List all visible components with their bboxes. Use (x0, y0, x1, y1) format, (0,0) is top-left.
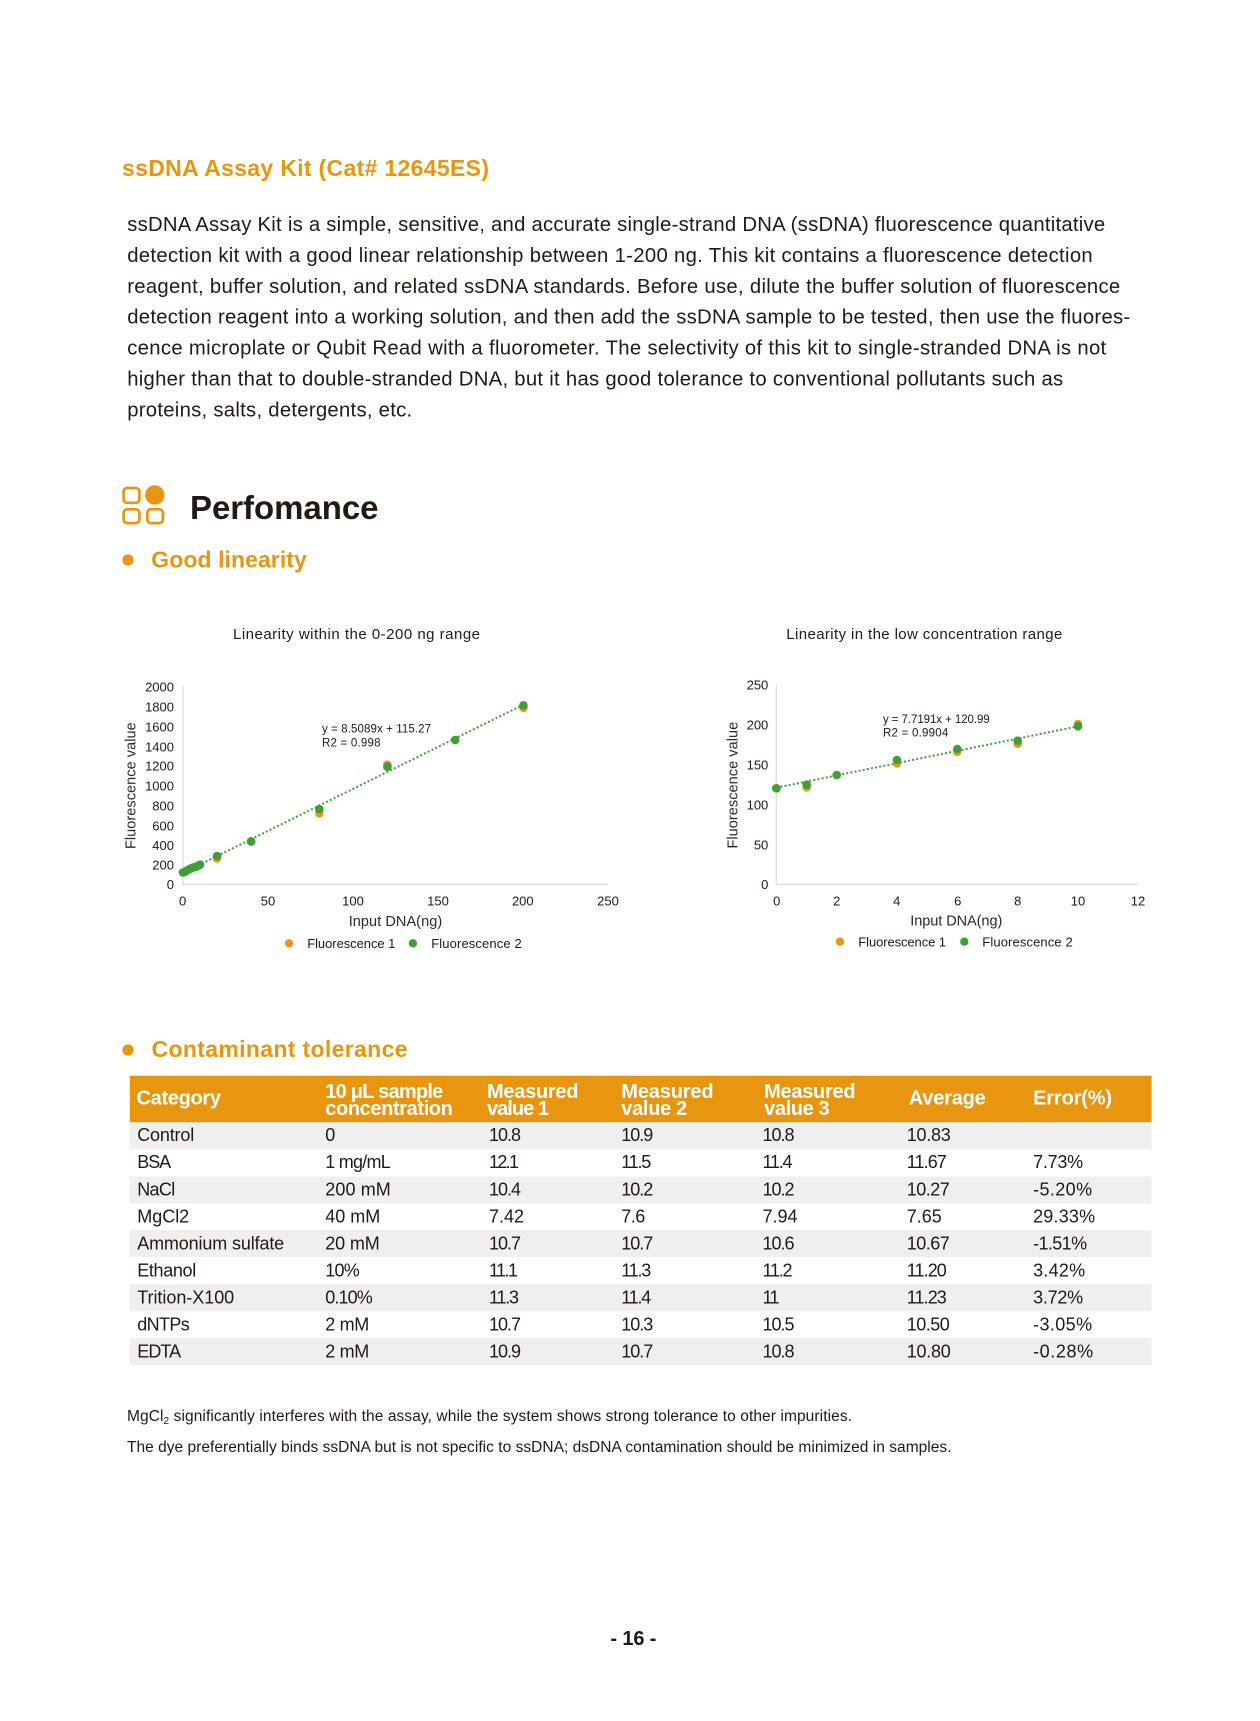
y axis ticks: 1000 (145, 778, 174, 794)
row: Ammonium sulfate (137, 1234, 1087, 1254)
row: dNTPs: dNTPs (137, 1314, 190, 1334)
series: fluorescence 1 (213, 703, 528, 863)
legend: Fluorescence 1 (307, 936, 395, 951)
table header: Measured (621, 1081, 714, 1103)
row: Ammonium sulfate: 20 mM (325, 1234, 380, 1254)
table header: Average (909, 1088, 986, 1110)
heading: Perfomance: Perfomance (190, 489, 378, 526)
table header: Measured (764, 1081, 856, 1103)
row: EDTA: 10.7 (621, 1342, 653, 1362)
x axis ticks: 100 (342, 894, 364, 908)
chart title: Linearity in the low concentration range (786, 626, 1062, 643)
row: Control: 10.8 (762, 1125, 794, 1145)
row: Ammonium sulfate: 10.6 (762, 1234, 794, 1254)
row: Ethanol: 10% (325, 1260, 360, 1280)
row: MgCl2: 7.42 (489, 1206, 524, 1226)
row: Ammonium sulfate: -1.51% (1033, 1234, 1087, 1254)
row: dNTPs (137, 1314, 1092, 1334)
equation (322, 724, 431, 750)
row: Control: Control (137, 1125, 194, 1145)
text block: notes (127, 1408, 952, 1456)
y axis title: Fluorescence value (124, 722, 140, 849)
page number: - 16 - (610, 1628, 656, 1650)
row: dNTPs: 10.7 (489, 1314, 521, 1334)
row: NaCl: 200 mM (325, 1180, 391, 1200)
row: NaCl: 10.27 (907, 1180, 950, 1200)
row: EDTA: 10.8 (762, 1342, 794, 1362)
y axis ticks: 600 (152, 818, 174, 834)
row: MgCl2: 29.33% (1033, 1206, 1095, 1226)
row: Control: 10.83 (907, 1125, 951, 1145)
text block: notes: 2 (164, 1416, 170, 1427)
table header: Category (136, 1088, 222, 1110)
row: EDTA: 10.9 (489, 1342, 521, 1362)
row: NaCl: NaCl (137, 1180, 175, 1200)
y axis ticks (145, 680, 174, 892)
text block: kit description: proteins, salts, detergents, etc. (127, 399, 412, 421)
row: BSA: 1 mg/mL (325, 1152, 391, 1172)
chart: linearity 0-200 ng (124, 626, 619, 951)
x axis ticks (773, 894, 1145, 908)
y axis ticks: 100 (747, 798, 768, 812)
text block: kit description: ssDNA Assay Kit is a simple, sensitive, and accurate single-strand DNA (ssDNA) fluorescence quantitative (127, 214, 1105, 236)
y axis ticks: 0 (167, 877, 174, 892)
series: fluorescence 1 (772, 720, 1082, 793)
row: NaCl: 10.2 (621, 1180, 653, 1200)
y axis ticks: 0 (761, 877, 768, 892)
text block: kit description: cence microplate or Qubit Read with a fluorometer. The selectivity of this kit to single-stranded DNA is not (127, 338, 1107, 360)
row: MgCl2: 40 mM (325, 1206, 380, 1226)
row: MgCl2: 7.94 (762, 1206, 798, 1226)
row: Ethanol: 11.2 (762, 1260, 792, 1280)
table header: value 2 (621, 1098, 687, 1120)
chart: linearity low concentration (726, 626, 1145, 949)
y axis ticks: 1600 (145, 720, 174, 734)
row: Trition-X100 (137, 1288, 1083, 1308)
table header: value 3 (764, 1098, 830, 1120)
row: MgCl2: MgCl2 (137, 1206, 189, 1226)
row: BSA (137, 1152, 1083, 1172)
row: Ethanol: 11.1 (489, 1260, 518, 1280)
text block: kit description: detection reagent into a working solution, and then add the ssDNA sample to be tested, then use the fluores- (127, 307, 1130, 329)
row: Control: 10.9 (621, 1125, 653, 1145)
chart title: Linearity within the 0-200 ng range (233, 626, 480, 643)
row: Trition-X100: 0.10% (325, 1288, 373, 1308)
table header: 10 μL sample (325, 1081, 443, 1103)
x axis ticks: 200 (512, 894, 534, 908)
x axis ticks: 0 (773, 894, 780, 908)
heading: Good linearity: Good linearity (151, 546, 307, 572)
legend: Fluorescence 2 (431, 936, 522, 951)
row: EDTA: 10.80 (907, 1342, 951, 1362)
table row stripes (130, 1122, 1152, 1365)
y axis ticks: 200 (747, 718, 768, 732)
trendline (183, 705, 523, 873)
equation: y = 8.5089x + 115.27 (322, 724, 431, 736)
row: Ethanol: Ethanol (137, 1260, 196, 1280)
row: Ethanol: 11.20 (907, 1260, 947, 1280)
equation: y = 7.7191x + 120.99 (883, 714, 990, 726)
text block: kit description: higher than that to double-stranded DNA, but it has good tolerance to conventional pollutants such as (127, 368, 1063, 390)
row: Ethanol (137, 1260, 1085, 1280)
row: Ethanol: 3.42% (1033, 1260, 1085, 1280)
axes (183, 687, 608, 884)
row: NaCl: 10.4 (489, 1180, 521, 1200)
row: NaCl: -5.20% (1033, 1180, 1092, 1200)
legend: Fluorescence 2 (982, 934, 1073, 949)
x axis ticks: 8 (1014, 894, 1021, 908)
x axis ticks: 2 (833, 894, 840, 908)
y axis ticks (747, 678, 768, 892)
equation: R2 = 0.9904 (883, 727, 949, 739)
row: dNTPs: -3.05% (1033, 1314, 1092, 1334)
heading: Contaminant tolerance: Contaminant tolerance (152, 1036, 408, 1062)
row: Trition-X100: 3.72% (1033, 1288, 1083, 1308)
row: EDTA: EDTA (137, 1342, 181, 1362)
y axis ticks: 250 (747, 678, 768, 692)
legend (836, 934, 1073, 949)
row: MgCl2: 7.6 (621, 1206, 645, 1226)
text block: kit description (127, 214, 1130, 421)
x axis ticks: 6 (954, 894, 961, 908)
row: BSA: 11.67 (907, 1152, 947, 1172)
row: BSA: 11.5 (621, 1152, 651, 1172)
x axis ticks: 12 (1131, 894, 1145, 908)
x axis ticks: 0 (179, 894, 186, 908)
table header: Error(%) (1033, 1088, 1112, 1110)
text block: notes: The dye preferentially binds ssDNA but is not specific to ssDNA; dsDNA contamination should be minimized in samples. (127, 1439, 952, 1456)
row: Ethanol: 11.3 (621, 1260, 651, 1280)
row: dNTPs: 10.5 (762, 1314, 794, 1334)
row: Control: 0 (325, 1125, 335, 1145)
table header (130, 1076, 1152, 1122)
equation (883, 714, 990, 739)
x axis ticks: 4 (893, 894, 900, 908)
series: fluorescence 2 (179, 701, 528, 877)
row: Ammonium sulfate: 10.7 (621, 1234, 653, 1254)
row: BSA: BSA (137, 1152, 171, 1172)
text block: kit description: detection kit with a good linear relationship between 1-200 ng. This kit contains a fluorescence detection (127, 245, 1093, 267)
row: MgCl2 (137, 1206, 1095, 1226)
y axis ticks: 1800 (145, 700, 174, 714)
row: EDTA: 2 mM (325, 1342, 369, 1362)
row: Trition-X100: 11.3 (489, 1288, 519, 1308)
text block: kit description: reagent, buffer solution, and related ssDNA standards. Before use, dilute the buffer solution of fluorescence (127, 276, 1120, 298)
y axis title: Fluorescence value (726, 722, 742, 848)
text block: notes: significantly interferes with the assay, while the system shows strong tolerance to other impurities. (169, 1408, 852, 1425)
row: NaCl: 10.2 (762, 1180, 794, 1200)
legend (285, 936, 522, 951)
table header: Measured (487, 1081, 578, 1103)
table: contaminant tolerance (130, 1076, 1152, 1365)
y axis ticks: 800 (152, 798, 174, 814)
y axis ticks: 1200 (145, 758, 174, 774)
y axis ticks: 200 (152, 858, 174, 872)
y axis ticks: 400 (152, 838, 174, 853)
axes (776, 685, 1138, 884)
equation: R2 = 0.998 (322, 738, 380, 750)
row: Trition-X100: Trition-X100 (137, 1288, 234, 1308)
x axis ticks: 250 (597, 894, 619, 908)
row: NaCl (137, 1180, 1092, 1200)
x axis title: Input DNA(ng) (349, 914, 442, 930)
y axis ticks: 150 (747, 758, 768, 772)
table header: value 1 (487, 1098, 549, 1120)
row: Control: 10.8 (489, 1125, 521, 1145)
row: dNTPs: 10.3 (621, 1314, 653, 1334)
title: ssDNA Assay Kit: ssDNA Assay Kit (Cat# 12645ES) (122, 155, 489, 181)
y axis ticks: 1400 (145, 740, 174, 754)
row: EDTA: -0.28% (1033, 1342, 1093, 1362)
legend: Fluorescence 1 (858, 934, 946, 949)
row: Ammonium sulfate: Ammonium sulfate (137, 1234, 284, 1254)
row: BSA: 7.73% (1033, 1152, 1083, 1172)
y axis ticks: 2000 (145, 680, 174, 694)
text block: notes: MgCl (127, 1408, 163, 1425)
y axis ticks: 50 (754, 838, 768, 852)
x axis ticks: 50 (261, 894, 275, 908)
x axis ticks (179, 894, 619, 908)
row: Trition-X100: 11.23 (907, 1288, 947, 1308)
row: dNTPs: 10.50 (907, 1314, 950, 1334)
row: MgCl2: 7.65 (907, 1206, 942, 1226)
row: EDTA (137, 1342, 1093, 1362)
trendline (776, 726, 1078, 788)
row: Trition-X100: 11.4 (621, 1288, 651, 1308)
row: Ammonium sulfate: 10.7 (489, 1234, 521, 1254)
series: fluorescence 2 (772, 722, 1082, 793)
x axis ticks: 10 (1071, 894, 1085, 908)
row: dNTPs: 2 mM (325, 1314, 369, 1334)
row: BSA: 11.4 (762, 1152, 792, 1172)
x axis title: Input DNA(ng) (910, 913, 1002, 929)
row: Trition-X100: 11 (762, 1288, 780, 1308)
row: Ammonium sulfate: 10.67 (907, 1234, 950, 1254)
row: BSA: 12.1 (489, 1152, 519, 1172)
icon: performance squares (124, 485, 164, 523)
table header: concentration (325, 1098, 453, 1120)
row: Control (137, 1125, 951, 1145)
x axis ticks: 150 (427, 894, 449, 908)
